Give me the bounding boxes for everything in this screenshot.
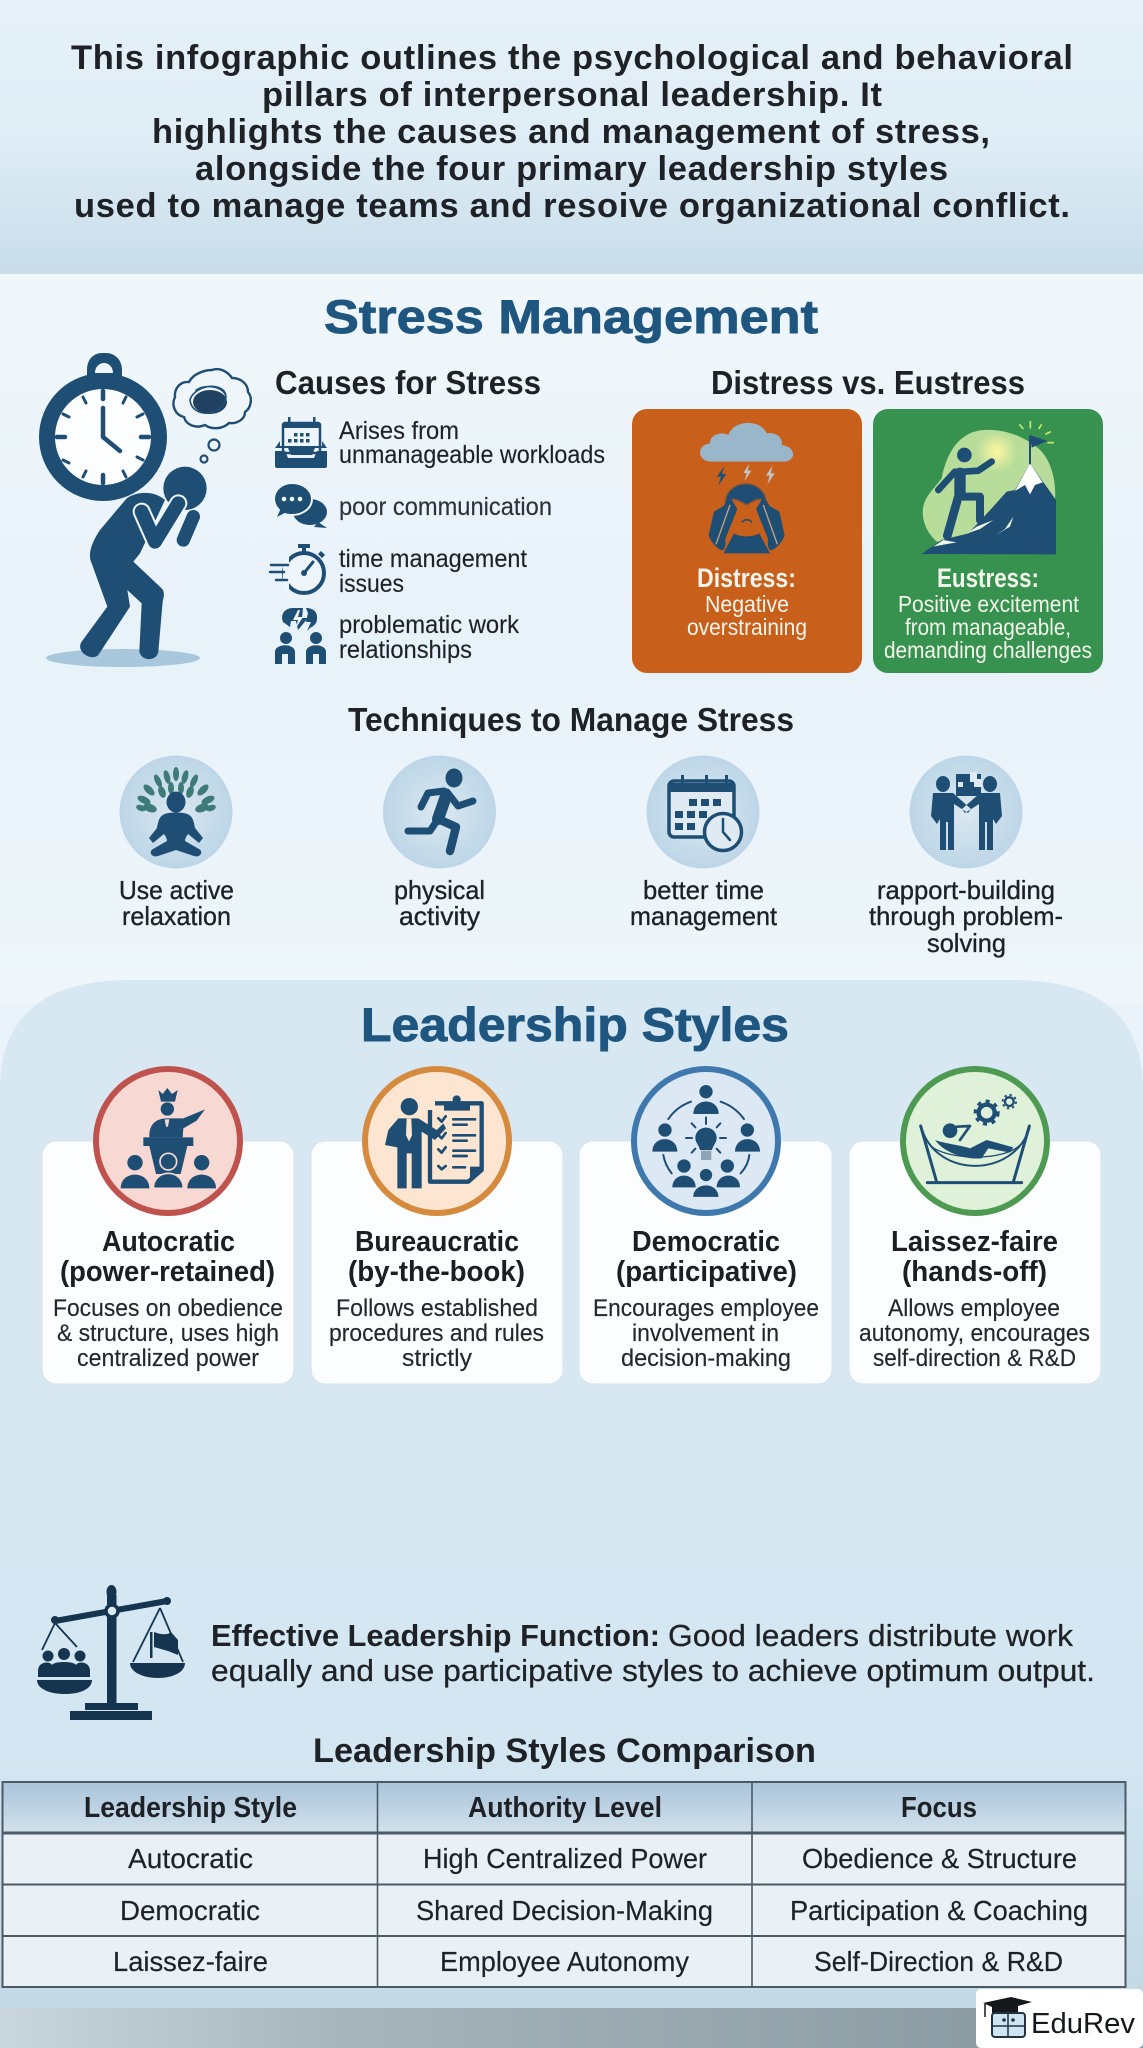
- text: democratic: (participative): [616, 1256, 797, 1288]
- heading: comparison: Leadership Styles Comparison: [313, 1732, 816, 1770]
- heading: techniques: Techniques to Manage Stress: [348, 701, 794, 738]
- icon: balance scales: [37, 1585, 185, 1720]
- text: autocratic: Autocratic: [102, 1226, 235, 1258]
- text: laissez-faire: [859, 1226, 1090, 1372]
- card: democratic: [579, 1069, 832, 1384]
- callout: effective leadership function: equally and use participative styles to achieve optimum output.: [211, 1653, 1095, 1688]
- icon: conflict people: [275, 608, 326, 664]
- table row: democratic: Democratic: [120, 1895, 260, 1926]
- text: eustress label: [884, 563, 1092, 663]
- text: democratic: [593, 1226, 819, 1372]
- intro text: alongside the four primary leadership styles: [195, 150, 948, 188]
- text: autocratic: [53, 1226, 283, 1372]
- table row: laissez-faire: [113, 1946, 1063, 1977]
- text: democratic: Encourages employee: [593, 1295, 819, 1322]
- table header: Focus: [901, 1792, 977, 1824]
- text: bureaucratic: Bureaucratic: [355, 1226, 519, 1258]
- text: relationships: problematic work: [339, 611, 519, 639]
- technique: rapport building: [869, 756, 1063, 958]
- card: distress: [632, 409, 862, 673]
- text: democratic: decision-making: [621, 1345, 791, 1372]
- text: eustress label: Positive excitement: [898, 591, 1080, 617]
- table row: laissez-faire: Laissez-faire: [113, 1946, 268, 1977]
- text: time management: better time: [643, 875, 764, 905]
- text: democratic: Democratic: [632, 1226, 780, 1258]
- text: rapport building: rapport-building: [877, 875, 1055, 905]
- icon: stopwatch: [270, 544, 325, 593]
- text: autocratic: & structure, uses high: [57, 1320, 279, 1347]
- text: distress label: Distress:: [697, 563, 796, 593]
- icon: handshake with puzzle: [910, 756, 1022, 868]
- intro text: highlights the causes and management of stress,: [152, 113, 990, 151]
- table row: autocratic: Obedience & Structure: [802, 1843, 1077, 1874]
- text: eustress label: demanding challenges: [884, 637, 1092, 663]
- icon: storm cloud and stressed person: [700, 423, 793, 553]
- icon: person in hammock: [903, 1069, 1047, 1213]
- text: time management: [339, 545, 527, 598]
- table row: laissez-faire: Employee Autonomy: [440, 1946, 689, 1977]
- text: autocratic: centralized power: [77, 1345, 259, 1372]
- text: workloads: [339, 417, 605, 469]
- text: laissez-faire: Allows employee: [888, 1295, 1060, 1322]
- intro text: used to manage teams and resoive organizational conflict.: [74, 187, 1070, 225]
- text: relaxation: relaxation: [122, 901, 231, 931]
- panel: causes for stress: [270, 364, 605, 664]
- card: bureaucratic: [311, 1069, 563, 1384]
- table row: laissez-faire: Self-Direction & R&D: [814, 1946, 1063, 1977]
- text: time management: management: [630, 901, 778, 931]
- table: leadership styles comparison: [2, 1782, 1126, 1987]
- icon: calendar workload: [275, 417, 327, 468]
- text: workloads: unmanageable workloads: [339, 441, 605, 469]
- icon: calendar and clock: [646, 756, 760, 868]
- text: physical activity: activity: [399, 901, 480, 931]
- text: eustress label: Eustress:: [937, 563, 1039, 593]
- table header: [84, 1792, 977, 1824]
- text: laissez-faire: (hands-off): [902, 1256, 1047, 1288]
- table row: democratic: [120, 1895, 1088, 1926]
- text: bureaucratic: Follows established: [336, 1295, 538, 1322]
- text: rapport building: through problem-: [869, 901, 1063, 931]
- technique: time management: [630, 756, 778, 931]
- heading: Stress Management: Stress Management: [324, 290, 818, 343]
- callout: effective leadership function: Good leaders distribute work: [668, 1618, 1074, 1653]
- text: rapport building: [869, 875, 1063, 958]
- text: bureaucratic: (by-the-book): [348, 1256, 525, 1288]
- icon: runner: [383, 756, 496, 868]
- logo: EduRev: EduRev: [1031, 2008, 1136, 2040]
- text: bureaucratic: strictly: [402, 1345, 473, 1372]
- card: eustress: [873, 409, 1103, 673]
- heading: Leadership Styles: Leadership Styles: [361, 998, 789, 1051]
- table row: democratic: Shared Decision-Making: [416, 1895, 713, 1926]
- text: distress label: Negative: [705, 591, 789, 617]
- text: communication: poor communication: [339, 493, 552, 521]
- icon: person with checklist: [365, 1069, 509, 1213]
- callout: effective leadership function: [211, 1618, 1095, 1688]
- text: time management: [630, 875, 778, 931]
- text: time management: time management: [339, 545, 527, 573]
- text: relaxation: Use active: [119, 875, 234, 905]
- table row: autocratic: [128, 1843, 1077, 1874]
- logo: EduRev: [976, 1989, 1143, 2048]
- text: autocratic: Focuses on obedience: [53, 1295, 283, 1322]
- text: laissez-faire: autonomy, encourages: [859, 1320, 1090, 1347]
- text: autocratic: (power-retained): [60, 1256, 275, 1288]
- card: laissez-faire: [849, 1069, 1101, 1384]
- icon: chat bubbles: [274, 483, 327, 528]
- table row: autocratic: High Centralized Power: [423, 1843, 707, 1874]
- text: democratic: involvement in: [632, 1320, 779, 1347]
- intro text: This infographic outlines the psychological and behavioral: [71, 39, 1073, 77]
- text: rapport building: solving: [927, 928, 1006, 958]
- table row: democratic: Participation & Coaching: [790, 1895, 1088, 1926]
- table header: Authority Level: [468, 1792, 662, 1824]
- callout: effective leadership function: Effective Leadership Function:: [211, 1618, 660, 1653]
- text: time management: issues: [339, 570, 404, 598]
- text: bureaucratic: procedures and rules: [329, 1320, 544, 1347]
- technique: relaxation: [119, 756, 234, 931]
- text: distress label: [687, 563, 807, 640]
- technique: physical activity: [383, 756, 496, 931]
- text: relationships: [339, 611, 519, 664]
- icon: team around lightbulb: [634, 1069, 778, 1213]
- icon: leader at podium: [96, 1069, 240, 1213]
- text: relaxation: [119, 875, 234, 931]
- text: relationships: relationships: [339, 636, 472, 664]
- text: workloads: Arises from: [339, 417, 459, 445]
- text: physical activity: [394, 875, 485, 931]
- text: laissez-faire: Laissez-faire: [891, 1226, 1058, 1258]
- icon: climber on mountain: [922, 421, 1056, 554]
- text: physical activity: physical: [394, 875, 485, 905]
- table header: Leadership Style: [84, 1792, 297, 1824]
- intro text: [71, 39, 1073, 225]
- card: autocratic: [42, 1069, 294, 1384]
- heading: distress vs eustress: Distress vs. Eustress: [711, 364, 1025, 401]
- heading: causes for stress: Causes for Stress: [275, 364, 541, 401]
- intro text: pillars of interpersonal leadership. It: [262, 76, 882, 114]
- icon: meditating figure: [120, 756, 232, 868]
- text: eustress label: from manageable,: [905, 614, 1071, 640]
- text: laissez-faire: self-direction & R&D: [873, 1345, 1076, 1372]
- table row: autocratic: Autocratic: [128, 1843, 253, 1874]
- illustration: person carrying clock: [46, 353, 251, 667]
- text: bureaucratic: [329, 1226, 544, 1372]
- text: distress label: overstraining: [687, 614, 807, 640]
